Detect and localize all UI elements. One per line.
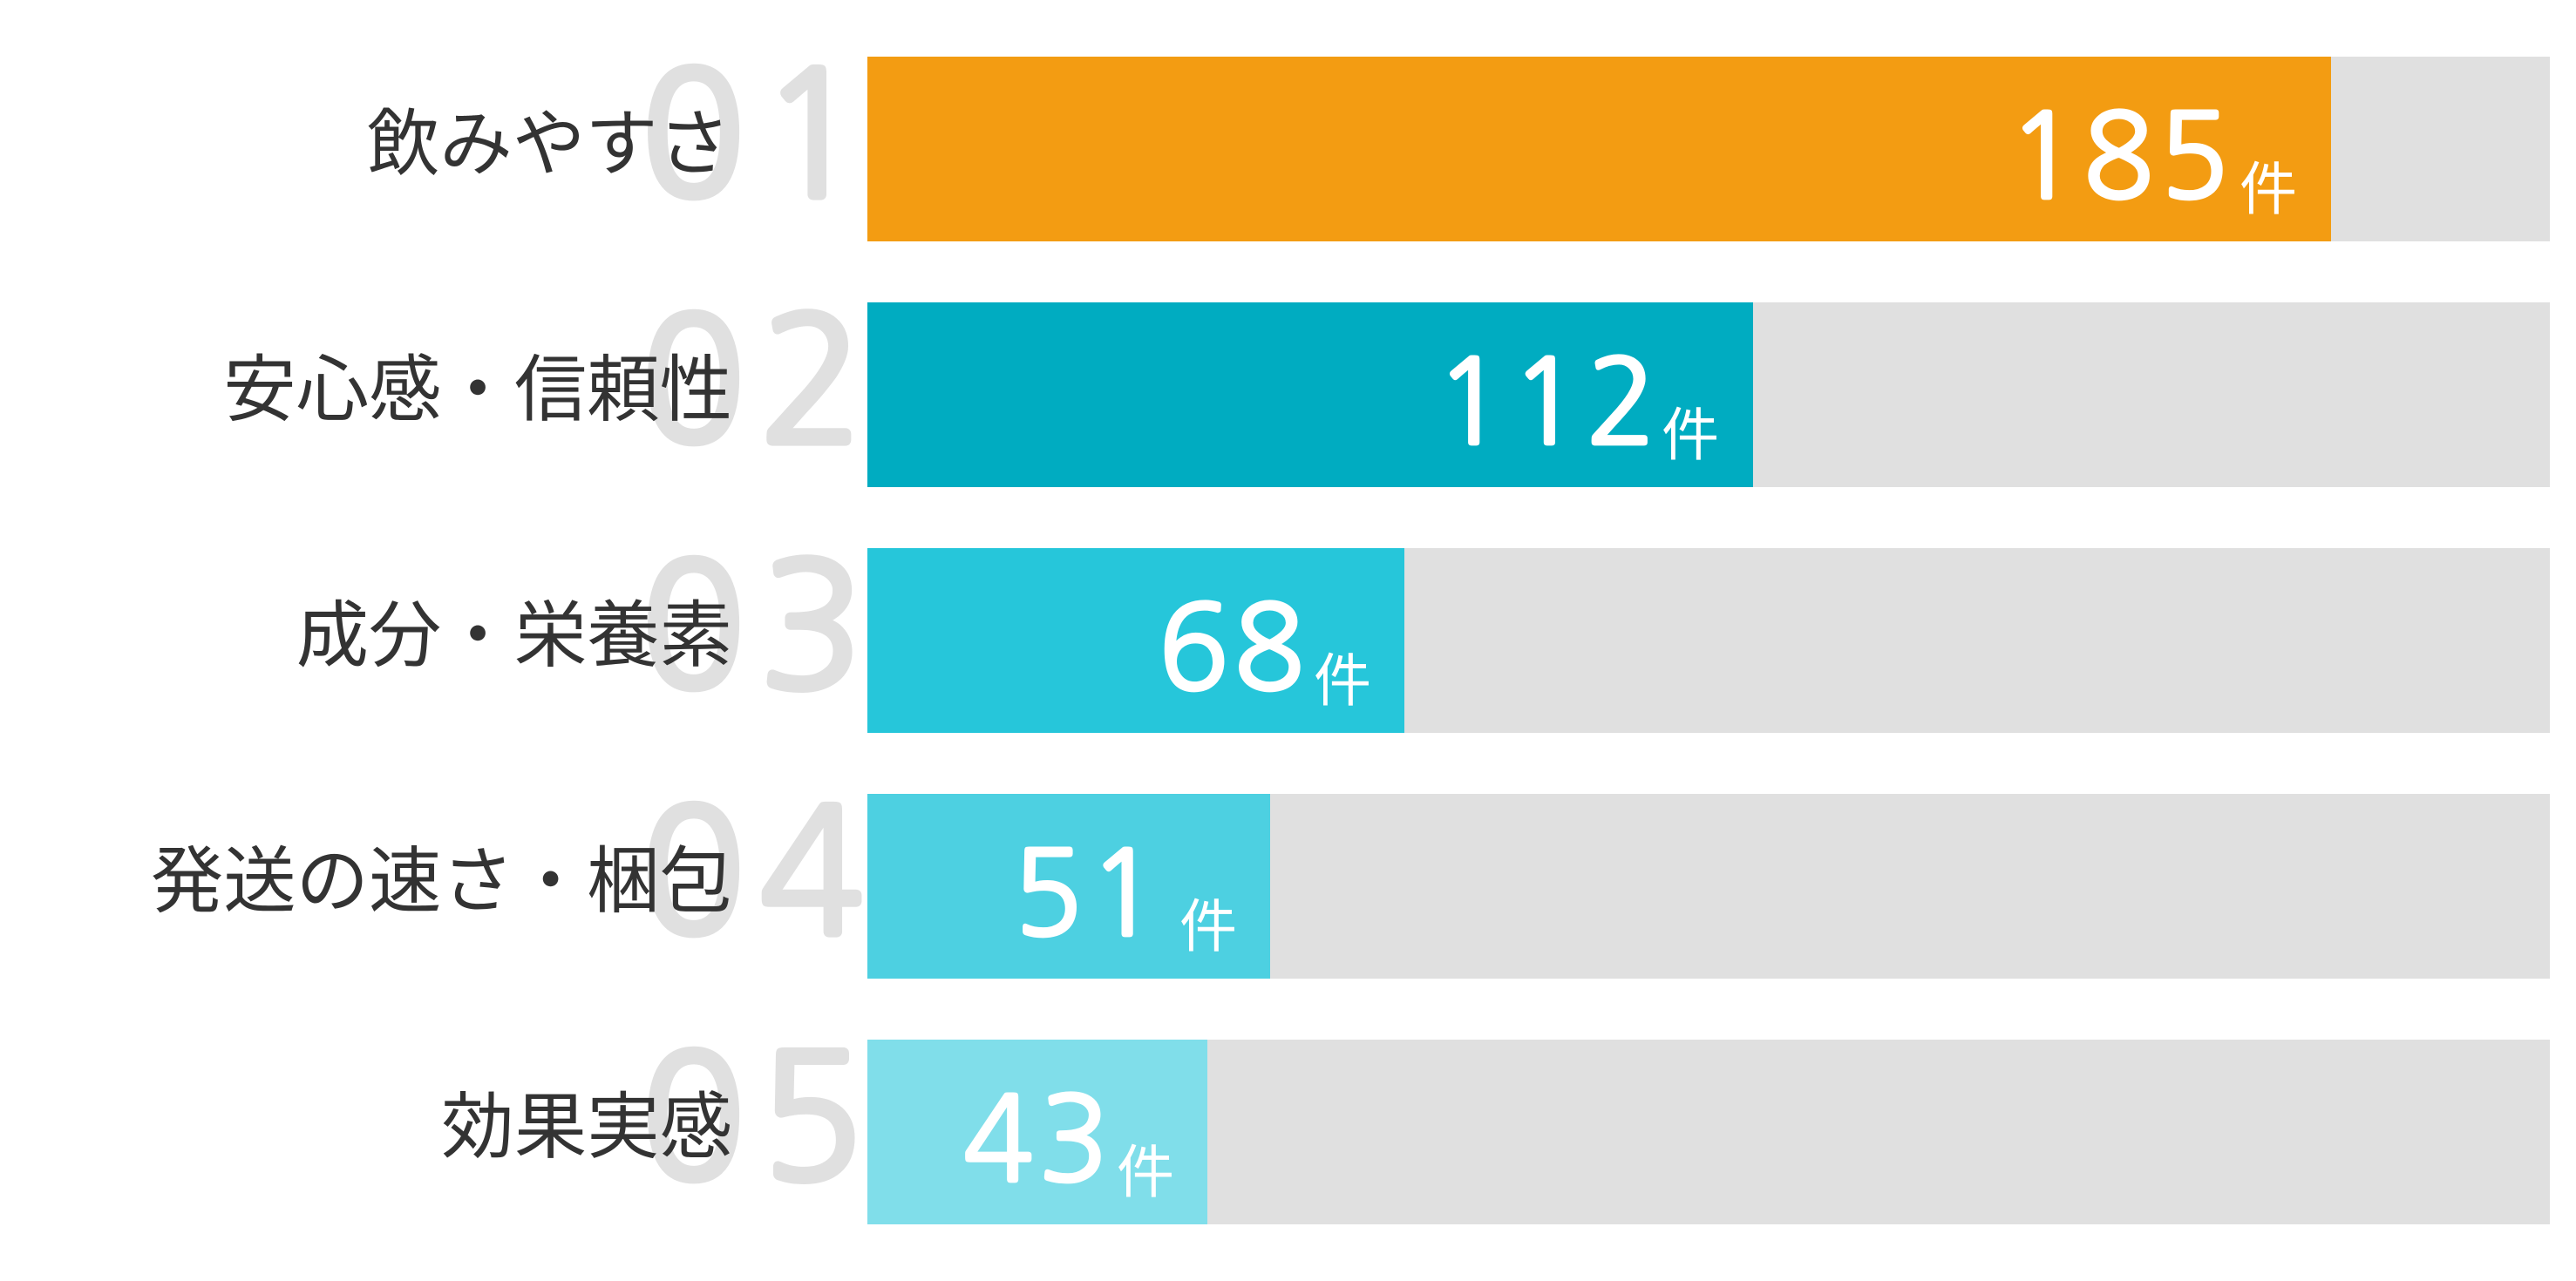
row 04: 発送の速さ・梱包: [151, 786, 2550, 979]
value: 112: [1435, 344, 1662, 461]
unit: 件: [1662, 403, 1719, 467]
bar track: [867, 548, 2550, 733]
bar fill: [867, 794, 1270, 979]
label: 発送の速さ・梱包: [151, 841, 732, 922]
bar track: [867, 302, 2550, 487]
row 03: 成分・栄養素: [296, 540, 2550, 733]
bar fill: [867, 302, 1753, 487]
bar track: [867, 57, 2550, 241]
bar track: [867, 1040, 2550, 1224]
label: 効果実感: [441, 1087, 732, 1168]
rank number 05: 05: [641, 1032, 878, 1204]
unit: 件: [2240, 157, 2297, 221]
value: 185: [2008, 98, 2234, 215]
value: 51: [1013, 836, 1164, 952]
row 05: 効果実感: [441, 1032, 2550, 1224]
unit: 件: [1179, 894, 1237, 959]
bar fill: [867, 57, 2331, 241]
label: 安心感・信頼性: [223, 349, 732, 430]
unit: 件: [1117, 1140, 1174, 1204]
bar fill: [867, 1040, 1207, 1224]
rank number 02: 02: [641, 295, 878, 467]
rank number 03: 03: [641, 540, 878, 713]
bar fill: [867, 548, 1404, 733]
value: 68: [1159, 590, 1309, 707]
rank number 04: 04: [641, 786, 878, 959]
row 01: 飲みやすさ: [367, 49, 2550, 241]
value: 43: [963, 1081, 1114, 1198]
row 02: 安心感・信頼性: [223, 295, 2550, 487]
label: 成分・栄養素: [296, 595, 732, 676]
label: 飲みやすさ: [367, 104, 731, 185]
unit: 件: [1314, 648, 1371, 713]
rank number 01: 01: [641, 49, 878, 221]
bar track: [867, 794, 2550, 979]
